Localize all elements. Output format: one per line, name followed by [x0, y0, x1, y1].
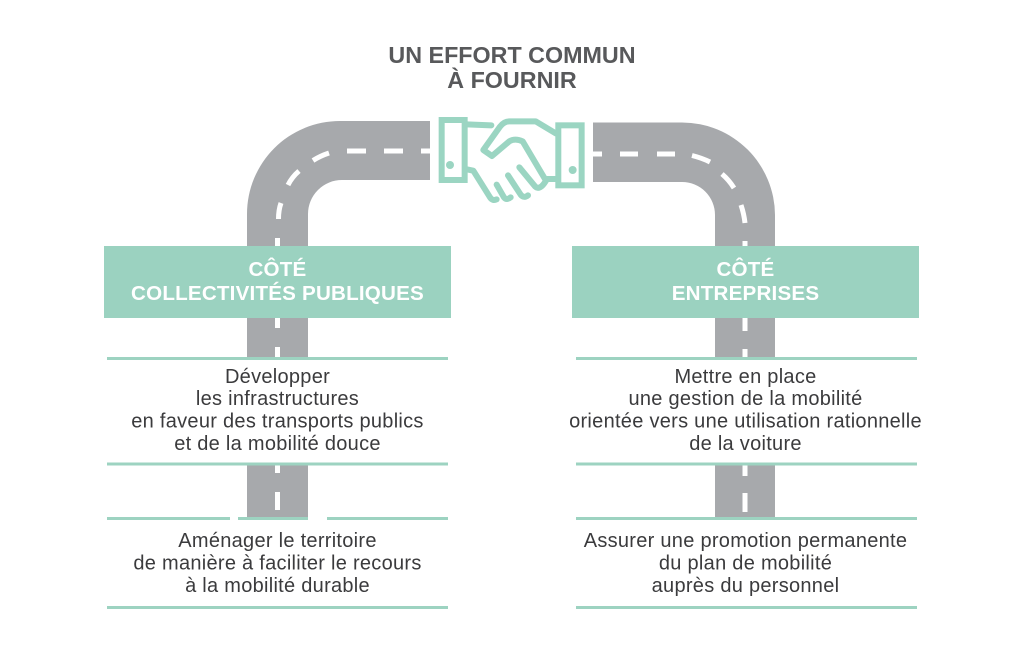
left action 2: à la mobilité durable [185, 575, 370, 597]
title: À FOURNIR [447, 66, 577, 93]
panel: côté collectivités publiques: CÔTÉ [248, 257, 307, 281]
left action 1: Développer [225, 366, 330, 388]
panel: côté entreprises [572, 246, 919, 318]
road: left side [247, 121, 430, 518]
left action 2 [107, 517, 448, 609]
title [388, 42, 636, 93]
right action 1: de la voiture [689, 433, 802, 455]
right action 1: Mettre en place [674, 366, 817, 388]
right action 2 [576, 517, 917, 609]
panel: côté collectivités publiques [104, 246, 451, 318]
left action 1 [107, 357, 448, 466]
right action 1: une gestion de la mobilité [628, 388, 863, 410]
right action 2: du plan de mobilité [659, 552, 832, 574]
left action 2: Aménager le territoire [178, 530, 377, 552]
icon: handshake [442, 120, 582, 200]
left action 1: les infrastructures [196, 388, 359, 410]
right action 1: orientée vers une utilisation rationnelle [569, 410, 922, 432]
left action 1: et de la mobilité douce [174, 433, 381, 455]
road: right side [593, 122, 775, 518]
left action 1: en faveur des transports publics [131, 410, 424, 432]
right action 2: Assurer une promotion permanente [584, 530, 907, 552]
panel: côté collectivités publiques: COLLECTIVITÉS PUBLIQUES [131, 282, 424, 305]
left action 2: de manière à faciliter le recours [133, 552, 422, 574]
title: UN EFFORT COMMUN [388, 42, 636, 68]
right action 2: auprès du personnel [652, 575, 839, 597]
panel: côté entreprises: ENTREPRISES [672, 282, 819, 305]
panel: côté entreprises: CÔTÉ [716, 257, 775, 281]
right action 1 [569, 357, 922, 466]
